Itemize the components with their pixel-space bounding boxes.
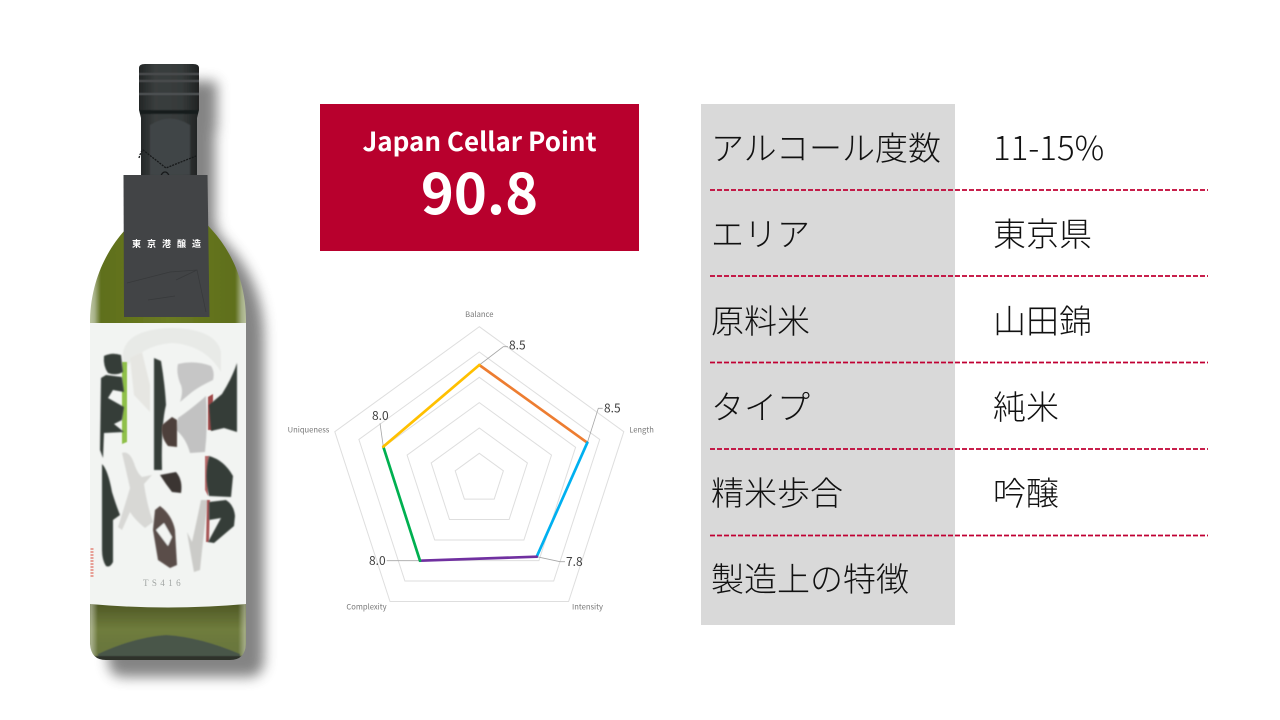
row: polishing label: 精米歩合 [711,467,843,515]
axis labels: Balance [465,309,493,320]
score value: 90.8 [421,150,538,231]
row: area value: 東京県 [993,208,1092,256]
row: rice label: 原料米 [711,295,810,343]
value labels [369,336,621,570]
label: small red vertical text [90,548,94,577]
value leader lines [380,347,603,562]
row: production label: 製造上の特徴 [711,553,909,601]
label: green and red accents [122,362,213,542]
bottle: glass body [85,60,255,665]
score box heading: Japan Cellar Point [362,122,597,159]
radar grid [335,327,624,602]
row: rice value: 山田錦 [993,295,1092,343]
row: polishing value: 吟醸 [993,467,1059,515]
axis labels [288,309,654,612]
value labels: 7.8 [566,553,583,570]
label: code text: TS416 [143,578,184,588]
bottle: front label [90,323,246,608]
row: area label: エリア [711,208,810,256]
value labels: 8.5 [509,336,526,354]
bottle: hang tag string [139,150,196,190]
radar chart [288,309,654,612]
row: alcohol value: 11-15% [993,122,1104,170]
row: type value: 純米 [993,381,1059,429]
label: brown striped strokes [153,417,181,568]
radar data line [383,365,587,561]
spec table [701,104,955,625]
label: grey calligraphy strokes [118,352,214,572]
row: type label: タイプ [711,381,810,429]
axis labels: Intensity [572,602,603,612]
bottle photograph [90,64,273,686]
table dividers [710,189,1208,536]
row: alcohol label: アルコール度数 [711,122,941,170]
score box [320,104,639,251]
bottle: drop shadow [108,81,264,677]
value labels: 8.0 [372,407,389,424]
value labels: 8.0 [369,552,386,569]
tag text: 東京港醸造 [132,237,207,250]
axis labels: Uniqueness [288,424,330,436]
axis labels: Complexity [346,602,387,612]
table label column [701,104,955,625]
label: dark calligraphy strokes [100,354,237,566]
bottle: neck tag [124,175,210,317]
axis labels: Length [629,424,654,436]
value labels: 8.5 [604,400,621,416]
